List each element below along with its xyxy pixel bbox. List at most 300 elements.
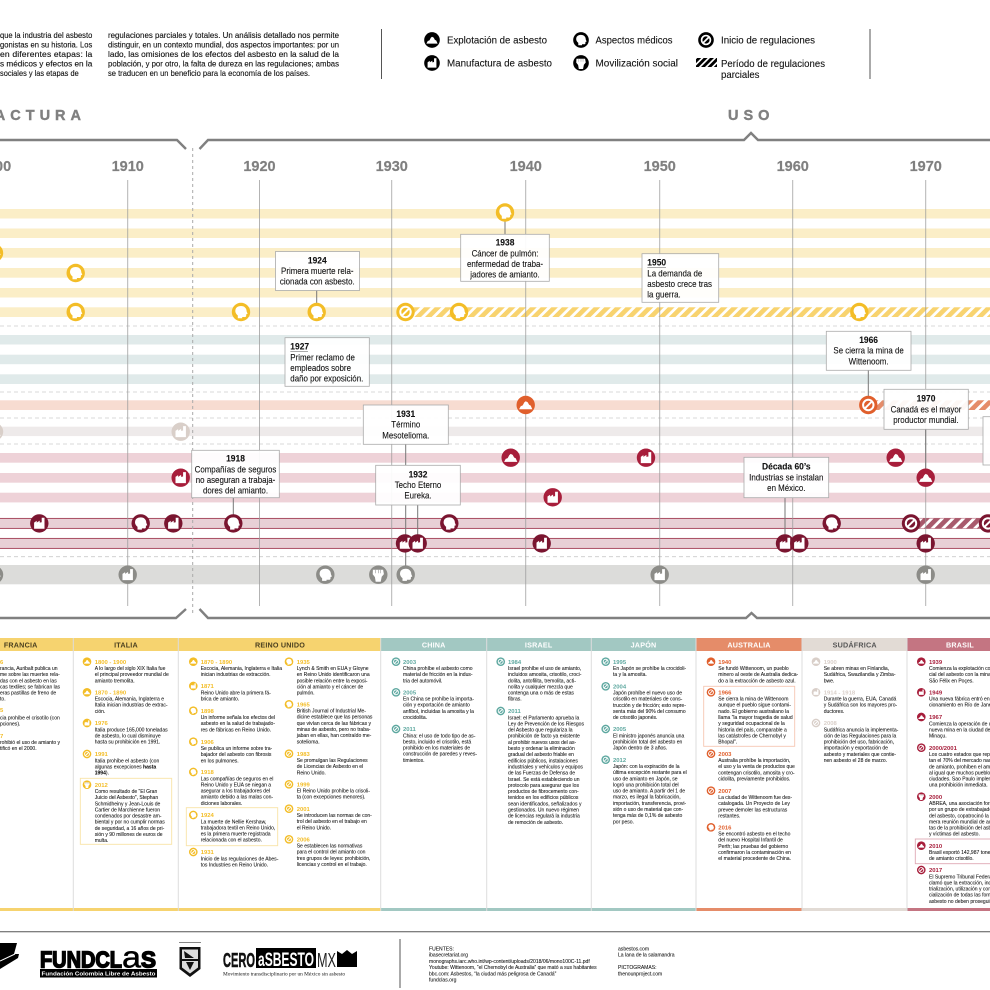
panel: Brasil: São Félix en Poçes. [929,678,974,684]
panel: Australia: las catástrofes de Chernobyl y [718,733,786,740]
panel: Israel [496,640,584,826]
panel: Israel: tenidos en los edificios públicos [508,795,579,801]
panel: Francia: cia prohíbe el crisotilo (con [0,715,60,722]
callout: 1938: Cáncer de pulmón: [472,248,538,258]
panel: Italia: ción. [95,709,105,715]
panel: Francia: me sobre las muertes rela- [0,672,60,678]
panel: Sudafrica: SUDÁFRICA [833,640,877,649]
panel: Australia: Perth; las pruebas del gobierno [718,844,788,850]
panel: Reino Unido: Se establecen las normativas [297,843,363,850]
panel: Reino Unido: ción al amianto y el cáncer de [297,684,363,691]
panel: Reino Unido: 1906 [201,740,215,746]
logo: cero asbesto mx: CERO [223,950,255,972]
logo: FUNDCLAS: FUNDCL [40,946,122,972]
intro text: en diferentes etapas: la [0,49,93,59]
panel: Brasil: cial del asbesto con la mina [929,672,990,678]
panel: Brasil: 2017 [929,868,943,874]
year labels: 1960 [777,159,809,175]
event markers: dark red [30,514,990,553]
panel: Reino Unido: minas de asbesto, pero no traba- [297,727,371,733]
panel: Australia: restantes. [718,813,740,820]
legend: Aspectos médicos [596,34,672,46]
panel: Italia: el principal proveedor mundial de [95,672,169,678]
panel: Italia: Como resultado de “El Gran [95,789,157,795]
intro text [0,30,339,78]
legend [424,32,825,81]
sources text: fundclas.org [429,978,457,984]
panel: Italia: amianto tremolita. [95,678,135,684]
panel: Italia: ). [106,770,109,777]
panel: Japon: por peso. [613,819,634,825]
callout: 1950: La demanda de [647,268,703,278]
panel: China: timientos. [403,758,425,764]
callout: 1950 [642,254,719,302]
panel: Sudafrica: 1900 [824,660,838,666]
logo: shield [179,942,201,977]
callout: 1932: Eureka. [404,490,432,501]
intro text: regulaciones parciales y totales. Un análisis detallado nos permite [108,30,339,40]
panel: Israel: ISRAEL [525,640,553,649]
panel: Reino Unido: en los pulmones. [201,758,239,764]
panel: Israel: gestionados. Un nuevo régimen [508,807,579,814]
panel: Italia: biental y por no cumplir normas [95,820,165,826]
panel: Italia: 2012 [95,783,109,789]
panel: Australia: llama “la mayor tragedia de salud [718,715,793,721]
panel: Israel: del Asbesto que regulariza la [508,727,573,734]
panel: China: 2005 [403,690,417,696]
panel: Italia: Italia prohíbe el asbesto (con [95,758,159,764]
panel: Australia: 2003 [718,752,732,758]
country header and footer bars [0,638,990,911]
panel: Reino Unido: trabajadora textil en Reino Unido, [201,825,275,832]
regulation hatched periods [405,307,990,528]
panel: Reino Unido: diciones laborales. [201,801,242,807]
panel: Reino Unido: asegurar a los trabajadores del [201,788,270,795]
panel: Francia: to. [0,697,6,703]
callout: 1966 [826,331,911,370]
panel: Sudafrica: ductores. [824,709,844,715]
panel: Italia: condenados por desastre am- [95,813,162,820]
callout: 1927: daño por exposición. [290,373,363,384]
panel: Japon: marzo, es ilegal la fabricación, [613,795,681,801]
panel: Reino Unido: Se promulgan las Regulaciones [297,758,368,764]
year labels: 1910 [112,159,144,175]
callout: 1924: Primera muerte rela- [281,266,354,276]
panel: Francia: das con el asbesto en las [0,678,57,684]
panel: Brasil: nueva mina en la ciudad de [929,727,990,734]
panel: Israel: productos de fibrocemento con- [508,789,579,795]
intro text: se traducen en un beneficio para la economía de los países. [108,68,310,78]
panel: Reino Unido: 2001 [297,807,311,813]
panel: Israel: edificios públicos, instalaciones [508,758,578,764]
pictograms credits: La lana de la salamandra [618,953,675,959]
panel: Sudafrica [812,640,899,764]
panel: Australia: do a la extracción de asbesto azul. [718,678,796,684]
panel: Israel: prohibición de facto ya existente [508,734,580,740]
panel: Sudafrica: nen asbesto el 28 de marzo. [824,758,887,764]
panel: China: besto, incluido el crisotilo, está [403,739,471,746]
callout: 1932 [376,465,460,505]
panel: Japon: prohibición total del asbesto en [613,739,682,746]
panel: Reino Unido: British Journal of Industrial Me- [297,708,366,715]
panel: Reino Unido: Inicio de las regulaciones de Abes- [201,856,279,862]
panel: China: China prohíbe el asbesto como [403,666,473,672]
panel: Sudafrica: importación y exportación de [824,746,888,752]
legend: Manufactura de asbesto [447,58,552,70]
panel: Australia: cidolita, previamente prohibidos. [718,776,790,783]
callout: 1932: 1932 [409,469,427,479]
panel: Brasil: 2000/2001 [929,746,958,752]
panel: Sudafrica: y Sudáfrica son los mayores pro- [824,703,897,709]
panel: Israel: fibras. [508,697,522,703]
intro text: distinguir, en un contexto mundial, dos aspectos importantes: por un [108,40,339,50]
panel: Japon: 1995 [613,660,627,666]
panel: Japon: El ministro japonés anuncia una [613,733,684,739]
panel: Reino Unido: que vivían cerca de las fábricas y [297,721,371,727]
panel: Israel: sean identificados, señalizados y [508,801,582,808]
panel: Israel: de las Fuerzas de Defensa de [508,770,575,777]
panel: Reino Unido: de Licencias de Asbesto en el [297,764,363,770]
panel: Francia: rohibió el uso de amianto y [0,740,60,746]
logo: cero asbesto mx: Movimiento transdisciplinario por un México sin asbesto [223,972,346,978]
panel: Australia: 1966 [718,690,732,696]
callout: 1931: 1931 [396,409,415,419]
panel: Japon: logró una prohibición total del [613,782,679,789]
panel: Reino Unido: Un informe señala los efectos del [201,715,275,721]
callout: decada 60s [744,457,829,498]
panel: Israel: 1984 [508,660,522,666]
panel: China: 2011 [403,727,417,733]
intro text: que la industria del asbesto [0,30,92,40]
panel: Sudafrica: prohibición del uso, fabricación, [824,739,894,746]
panel: China: China: el uso de todo tipo de as- [403,733,476,739]
panel: Israel: Israel. Se está estableciendo un [508,777,580,783]
timeline bands [0,209,990,584]
panel: Reino Unido: 1999 [297,782,311,788]
panel: Australia: 2007 [718,789,732,795]
panel: Australia: minero al oeste de Australia dedica- [718,672,798,678]
panel: Japon: tenga más de 0,1% de asbesto [613,813,682,819]
panel: Reino Unido: Se publica un informe sobre tra- [201,746,272,752]
panel: Reino Unido: Se introducen las normas de con- [297,813,372,819]
panel: Reino Unido: 1983 [297,752,311,758]
logo: FUNDCLAS: S [141,946,156,972]
panel: Australia: Bhopal”. [718,739,737,746]
panel: Reino Unido: licencias y control en el trabajo. [297,862,367,868]
callout: 1918: dores del amianto. [203,485,268,496]
panel: Italia: Schmidheiny y Jean-Louis de [95,801,160,807]
panel: Brasil: de amianto crisotilo. [929,856,974,862]
callout: decada 60s: Década 60’s [762,461,811,472]
callout: 1918: 1918 [226,453,245,464]
panel: Brasil: 1949 [929,690,943,696]
panel: Reino Unido: Lynch & Smith en EUA y Gloyne [297,666,369,672]
panel: Israel: Israel: el Parlamento aprueba la [508,715,579,721]
panel: Francia: 6 [0,660,4,666]
panel: Sudafrica: bwe. [824,678,834,684]
panel: Japon: crisotilo en materiales de cons- [613,697,682,703]
callout: 1950: la guerra. [647,289,681,300]
section heading: uso: USO [728,108,774,124]
panel: Brasil: Minaçu. [929,733,947,740]
panel: Reino Unido: para el control del amianto con [297,850,365,856]
legend: Explotación de asbesto [447,34,547,46]
sources text: bbc.com: Asbestos, “la ciudad más peligrosa de Canadá” [429,971,557,978]
pictograms credits: asbestos.com [618,946,649,953]
pictograms credits: thenounproject.com [618,971,662,978]
callout: 1918: no aseguran a trabaja- [196,475,275,485]
panel: Australia: 1940 [718,660,732,666]
panel: Sudafrica: Durante la guerra, EUA, Canadá [824,696,896,703]
intro text: sociales y las etapas de [0,68,79,78]
panel: Italia: Cartier de Marchienne fueron [95,807,160,814]
top axis brackets [0,133,990,149]
panel: Reino Unido: 1931 [201,850,215,856]
panel: Italia: Escocia, Alemania, Inglaterra e [95,696,164,703]
panel: Japon: uso de amianto en Japón, se [613,776,678,782]
panel: Reino Unido: Reino Unido y EUA se niegan a [201,782,271,789]
panel: Israel: industriales y vehículos y equipos [508,764,583,771]
panel: Israel: besto y ordenar la eliminación [508,746,575,752]
panel: Reino Unido: 1935 [297,660,311,666]
callout: 1931 [363,405,448,444]
panel: Japon: JAPÓN [631,640,656,649]
callout: 1938 [461,234,549,281]
panel: Reino Unido: res de fábricas en Reino Unido. [201,727,271,733]
panel: China: ción y exportación de amianto [403,703,470,709]
year labels [0,159,942,175]
panel: Australia: el uso y la venta de productos que [718,764,795,770]
panel: Japon: En Japón se prohíbe la crocidoli- [613,666,686,672]
legend: Inicio de regulaciones [721,34,815,46]
panel: Japon: importación, transferencia, provi- [613,801,686,807]
year labels: 1940 [510,159,542,175]
callout: 1918 [192,450,279,498]
panel: Reino Unido: pulmón. [297,690,315,697]
year labels: 1970 [910,159,942,175]
panel: Israel: de remoción de asbesto. [508,820,563,826]
panel: Francia: 7 [0,734,4,740]
panel: Reino Unido: Escocia, Alemania, Inglaterra e Italia [201,666,282,672]
panel: Australia: Se cierra la mina de Wittenoom [718,696,789,703]
connectors [233,221,926,566]
intro text: población, y por otro, la falta de dureza en las regulaciones; ambas [108,58,339,68]
panel: Israel: nolita y cualquier mezcla que [508,684,573,691]
panel: Israel: al prohibir nuevos usos del as- [508,740,576,746]
event markers: beige [0,422,190,441]
panel: Brasil: 1939 [929,660,943,666]
panel: Reino Unido: 1898 [201,709,215,715]
panel: Japon: Japón: con la expiración de la [613,764,680,770]
panel: Israel: incluidos amosita, crisotilo, croci- [508,672,582,678]
callout: 1927: empleados sobre [290,363,351,373]
panel: Reino Unido: REINO UNIDO [255,640,305,649]
year labels: 1930 [376,159,408,175]
panel: Reino Unido: tres grupos de leyes: prohibición, [297,856,370,862]
panel: Australia: prevee demoler las estructuras [718,807,788,813]
panel: Australia: Se fundó Wittenoom, un pueblo [718,666,789,672]
panel: Israel: Ley de Prevención de los Riesgos [508,721,584,728]
panel: China: construcción de paredes y reves- [403,752,477,758]
callout: 1970: 1970 [917,393,935,404]
panel: Reino Unido: 1965 [297,702,311,708]
intro text: s médicos y efectos en la [0,58,92,68]
panel: Sudafrica: 1914 - 1918 [824,690,856,696]
panel: Reino Unido: amianto debido a las malas con- [201,795,273,801]
logo: cero asbesto mx [223,948,357,978]
panel: China: tria del automóvil. [403,678,442,684]
panel: Italia: 1976 [95,721,109,727]
panel: Israel: de licencias regulará la industria [508,813,580,820]
callout: 1966: 1966 [859,335,878,345]
panel: Italia: 1800 - 1900 [95,660,127,666]
panel: Brasil: 1967 [929,715,943,721]
logo: hat emblem [0,943,19,969]
panel: Francia: rancia, Auribalt publica un [0,666,58,672]
panel: Reino Unido: 1871 [201,684,215,690]
event markers: yellow [0,203,869,321]
callout: 1970 [884,389,968,429]
callout: partial box at right edge [983,417,990,465]
panel: China: 2003 [403,660,417,666]
panel: Israel: gradual del asbesto friable en [508,752,574,758]
callout: 1932: Techo Eterno [395,480,442,490]
sources text: monographs.iarc.who.int/wp-content/uploads/2018/06/mono100C-11.pdf [429,959,590,965]
panel: Australia [704,640,798,862]
panel: Japon: ta y la amosita. [613,672,647,678]
panel: Australia: AUSTRALIA [727,640,771,649]
panel: Israel: contenga una o más de estas [508,690,574,697]
panel: Italia: sión y 90 millones de euros de [95,832,163,838]
panel: Italia: 1991 [95,752,109,758]
callout: 1924: cionada con asbesto. [280,276,355,287]
callout: 1970: Canadá es el mayor [891,404,962,414]
panel: Reino Unido: ta (con excepciones menores). [297,795,365,801]
panel: Japon: 2005 [613,727,627,733]
panel: Francia: eras pastillas de freno de [0,690,56,697]
callout: 1927: 1927 [290,341,309,352]
legend: parciales [721,69,760,81]
panel: Italia: de seguridad, a 16 años de pri- [95,826,164,832]
panel: Reino Unido: 2006 [297,838,311,844]
callout: 1931: Mesotelioma. [382,430,429,440]
legend: Período de regulaciones [721,58,825,70]
panel: Reino Unido: El Reino Unido prohíbe la crisoli- [297,788,370,795]
panel: Reino Unido: jaban en ellas, han contraído me- [296,733,372,739]
panel: Japon: uso de amianto. A partir del 1 de [613,788,685,795]
callout: 1970: productor mundial. [893,415,959,425]
panel: Francia [0,640,60,752]
panel: China: prohibido en los materiales de [403,745,470,752]
intro text: lado, las omisiones de los efectos del asbesto en la salud de la [108,49,339,59]
panel: Reino Unido [186,640,373,869]
logo: cero asbesto mx: MX [317,950,336,972]
panel: Italia: 1870 - 1890 [95,690,127,696]
logo: FUNDCLAS [40,940,157,978]
panel: Reino Unido: trol del asbesto en el trabajo en [297,819,367,825]
panel: Japon [601,640,687,825]
sources text: ibasecretariat.org [429,953,468,959]
panel: Australia: confirmaron la contaminación en [718,850,791,856]
panel: Japon: trucción y de fricción; esto repre- [613,703,686,709]
panel: Israel: Israel prohíbe el uso de amianto, [508,666,581,672]
panel: Italia: ITALIA [114,640,138,649]
panel: Reino Unido: relacionada con el asbesto. [201,838,262,844]
panel: China: crocidolita. [403,715,427,721]
panel: Israel: dolita, antofilita, tremolita, acti- [508,678,576,684]
logo: cero asbesto mx: aSBESTO [258,950,314,971]
panel: Brasil: una prohibición inmediata. [929,783,988,789]
panel: Reino Unido: Reino Unido abre la primera fá- [201,690,271,696]
panel: Japon: de crisotilo japonés. [613,715,657,721]
panel: Francia: tificó en el 2000. [0,746,37,752]
event markers: gray [0,566,935,584]
panel: Italia: 1994 [95,770,106,777]
panel: Italia: A lo largo del siglo XIX Italia fue [95,666,165,672]
panel: Francia: pciones). [0,721,20,728]
panel: Reino Unido: es la primera muerte registrada [201,831,271,838]
panel: Italia: hasta su prohibición en 1991. [95,739,160,746]
panel: Brasil: 2000 [929,795,943,801]
callout: 1918: Compañías de seguros [195,464,276,474]
panel: Sudafrica: Sudáfrica, Swazilandia y Zimba- [824,672,896,678]
panel: Australia: contengan crisotilo, amosita y cro- [718,770,795,776]
panel: Italia: de asbesto, lo cual disminuye [95,733,161,740]
panel: China: CHINA [422,640,446,649]
panel: Japon: Japón prohíbe el nuevo uso de [613,690,682,697]
panel: Reino Unido: posible relación entre la exposi- [297,678,368,684]
callout: 1931: Término [391,419,421,430]
panel: Sudafrica: Sudáfrica anuncia la implementa- [824,727,899,733]
panel: Sudafrica: ción de las Regulaciones para la [824,733,896,740]
panel: Australia: del nuevo Hospital Infantil de [718,838,783,844]
panel: Australia: y seguridad ocupacional de la [718,721,785,727]
panel: Italia: algunas excepciones hasta [95,764,156,771]
panel: Brasil [915,640,990,905]
event markers: red [172,448,935,506]
decade gridlines [128,148,926,615]
callout: 1927: Primer reclamo de [290,352,355,362]
panel: Australia: 2016 [718,826,732,832]
callout: 1950: 1950 [647,257,666,268]
panel: Brasil: 2010 [929,844,943,850]
callout: decada 60s: en México. [767,483,805,493]
panel: Reino Unido: 1924 [201,813,215,819]
panel: Sudafrica: asbesto y materiales que contie- [824,752,896,758]
panel: China [392,640,477,764]
panel: Reino Unido: dicine establece que las personas [297,715,373,721]
bottom axis brackets [0,609,990,618]
callout: 1924: 1924 [308,255,327,265]
panel: Italia: multa. [95,838,108,844]
panel: Reino Unido: 1918 [201,770,215,776]
panel: Italia: Italia produce 165,000 toneladas [95,727,168,733]
year labels: 1950 [644,159,676,175]
panel: Brasil: BRASIL [946,640,974,649]
callout: 1938: jadores de amianto. [469,269,540,280]
intro text: gonistas en su historia. Los [0,40,92,50]
panel: Reino Unido: 1870 - 1890 [201,660,233,666]
callout: 1924 [276,252,360,290]
panel: Reino Unido: inician industrias de extracción. [201,672,271,678]
panel: Reino Unido: Las compañías de seguros en el [201,776,273,782]
panel: Sudafrica: 2008 [824,721,838,727]
panel: Australia: Australia prohíbe la importación, [718,758,790,764]
panel: Reino Unido: La muerte de Nellie Kershaw, [201,819,266,825]
panel: Australia: aunque el pueblo sigue contami- [718,703,791,709]
panel: Francia: cas textiles; se fabrican las [0,684,60,691]
panel: Reino Unido: en Reino Unido identificaron una [297,672,370,678]
